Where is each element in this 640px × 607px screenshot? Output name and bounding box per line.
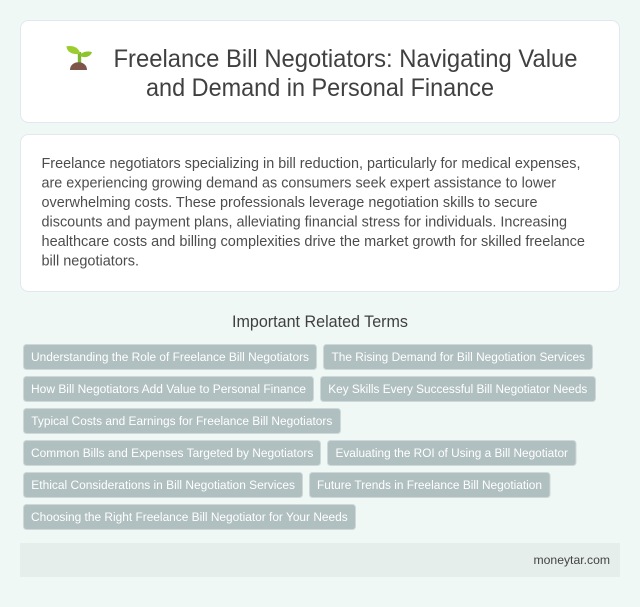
text block: description [42, 156, 585, 270]
chip: rising demand [324, 344, 592, 370]
chip: add value [24, 376, 314, 402]
chip: ethical considerations [24, 472, 302, 498]
chip: future trends: Future Trends in Freelance Bill Negotiation [317, 478, 542, 492]
text block: description: Freelance negotiators specializing in bill reduction, particularly for medical expenses, [42, 156, 580, 172]
title: Freelance Bill Negotiators: Navigating Value [114, 46, 578, 73]
text block: description: overwhelming costs. These professionals leverage negotiation skills to secure [42, 195, 538, 211]
panel: description [20, 134, 620, 292]
text block: description: healthcare costs and billing complexities drive the market growth for skilled freelance [42, 234, 585, 250]
chip group: related terms [24, 344, 596, 530]
footer: moneytar.com [534, 553, 610, 567]
chip: add value: How Bill Negotiators Add Value to Personal Finance [31, 382, 306, 396]
chip: understanding the role [24, 344, 316, 370]
panel: title header [20, 20, 620, 122]
chip: evaluating roi: Evaluating the ROI of Using a Bill Negotiator [336, 446, 568, 460]
chip: costs and earnings: Typical Costs and Earnings for Freelance Bill Negotiators [31, 414, 332, 428]
chip: common bills: Common Bills and Expenses Targeted by Negotiators [31, 446, 313, 460]
chip: common bills [24, 440, 320, 466]
chip: choosing the right negotiator: Choosing the Right Freelance Bill Negotiator for Your Needs [31, 510, 348, 524]
chip: key skills [320, 376, 596, 402]
title [114, 46, 578, 102]
heading: related terms: Important Related Terms [232, 313, 408, 331]
text block: description: discounts and payment plans, alleviating financial stress for individuals. Increasing [42, 214, 567, 230]
chip: costs and earnings [24, 408, 340, 434]
icon: sprout [66, 46, 92, 70]
text block: description: are experiencing growing demand as consumers seek expert assistance to lower [42, 176, 556, 192]
chip: ethical considerations: Ethical Considerations in Bill Negotiation Services [31, 478, 295, 492]
chip: future trends [310, 472, 550, 498]
chip: choosing the right negotiator [24, 504, 356, 530]
text block: description: bill negotiators. [42, 254, 139, 270]
chip: rising demand: The Rising Demand for Bill Negotiation Services [332, 350, 585, 364]
chip: understanding the role: Understanding the Role of Freelance Bill Negotiators [31, 350, 309, 364]
title: and Demand in Personal Finance [146, 75, 494, 102]
chip: evaluating roi [328, 440, 576, 466]
footer [20, 543, 620, 577]
chip: key skills: Key Skills Every Successful Bill Negotiator Needs [328, 382, 587, 396]
